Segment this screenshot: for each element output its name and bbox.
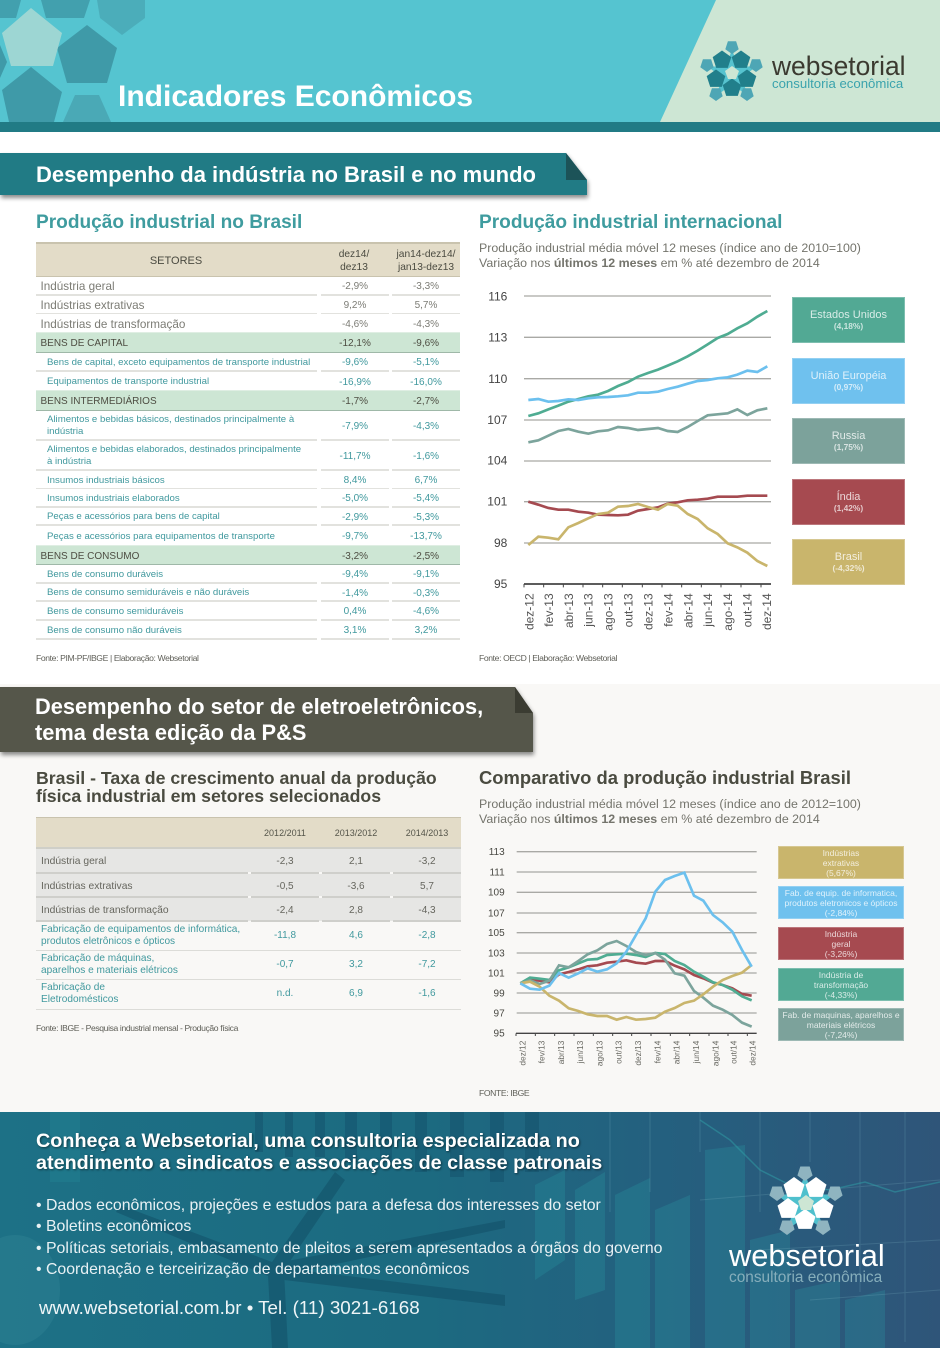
table header: 2014/2013 [406, 828, 448, 838]
x axis labels: ago/14 [710, 1040, 720, 1066]
legend: Indústria geral [778, 927, 904, 960]
row: Equipamentos de transporte [47, 376, 442, 388]
x axis labels: jun-13 [582, 593, 596, 628]
x axis labels: ago-14 [721, 593, 735, 631]
x axis labels: fev-14 [661, 593, 675, 627]
band: BENS INTERMEDIÁRIOS [36, 390, 460, 411]
legend: Fab. de máquinas: Fab. de maquinas, aparelhos e [782, 1010, 900, 1020]
row: Peças bens de capital [36, 511, 460, 526]
row: Alimentos básicos: -4,3% [413, 420, 439, 432]
legend: Fab. de equip. [778, 886, 904, 919]
row: Indústrias extrativas: Indústrias extrativas [41, 880, 133, 892]
row: não duráveis: Bens de consumo não duráveis [47, 624, 182, 636]
legend: Russia [792, 418, 905, 464]
legend: Brasil: Brasil [835, 551, 862, 563]
footer bullet list [36, 1197, 662, 1278]
table header: 2013/2012 [335, 828, 377, 838]
x axis labels: dez/13 [633, 1040, 643, 1066]
banner heading: Desempenho da indústria no Brasil e no mundo [36, 162, 536, 187]
row: consumo duráveis: -9,1% [413, 569, 439, 580]
table header: dez13 [340, 262, 368, 273]
y axis labels: 110 [488, 372, 508, 386]
chart description comparativo [479, 797, 861, 826]
row: não duráveis [36, 624, 460, 640]
row: Indústria geral: -2,9% [342, 281, 368, 292]
row: Indústrias de transformação: 2,8 [349, 904, 363, 916]
y axis labels [487, 289, 508, 591]
row: semiduráveis [36, 606, 460, 621]
table: produção industrial por setores [36, 242, 460, 640]
chart description international: Variação nos últimos 12 meses em % até dezembro de 2014 [479, 256, 820, 270]
row: Indústria geral: Indústria geral [41, 856, 106, 867]
row: Fabricação máquinas [36, 951, 461, 980]
table header: jan13-dez13 [398, 262, 454, 273]
series: Fab. de equip. de informática [520, 873, 752, 990]
brand name: websetorial [729, 1238, 885, 1273]
row: Indústria geral: -2,3 [276, 856, 294, 867]
row: Indústria geral: Indústria geral [40, 280, 115, 293]
row: Fabricação eletrodomésticos [36, 980, 461, 1010]
row: consumo duráveis [36, 568, 460, 584]
main title: Indicadores Econômicos [118, 80, 473, 113]
band: BENS DE CAPITAL: -9,6% [413, 338, 439, 349]
chart description international [479, 241, 861, 270]
legend: Indústria geral: Indústria [825, 928, 857, 938]
legend: Estados Unidos: Estados Unidos [810, 309, 887, 321]
x axis labels: out/13 [614, 1040, 624, 1064]
row: Peças equipamentos: -9,7% [342, 531, 368, 542]
row: consumo duráveis: -9,4% [342, 569, 368, 580]
row: Peças bens de capital: -5,3% [413, 512, 439, 522]
legend: Estados Unidos: (4,18%) [834, 321, 863, 331]
x axis [524, 584, 771, 587]
row: Indústrias extrativas: -0,5 [276, 880, 294, 892]
row: Indústrias extrativas [36, 299, 460, 314]
y axis labels: 107 [488, 908, 505, 919]
brand name: websetorial [772, 51, 906, 81]
series: Indústrias extrativas [520, 965, 752, 1020]
row: Indústrias extrativas [36, 874, 461, 898]
row: Indústria geral [36, 849, 461, 874]
row: Indústrias extrativas: -3,6 [347, 880, 365, 892]
legend: Indústrias extrativas: extrativas [823, 858, 859, 868]
source note chart 1: Fonte: OECD | Elaboração: Websetorial [479, 653, 617, 663]
band: BENS DE CAPITAL: BENS DE CAPITAL [40, 338, 128, 349]
contact line: www.websetorial.com.br • Tel. (11) 3021-6168 [39, 1297, 420, 1318]
y axis labels: 95 [494, 1029, 505, 1040]
y axis labels: 107 [487, 413, 508, 427]
row: Fabricação máquinas: -7,2 [418, 959, 436, 970]
row: não duráveis: 3,2% [415, 625, 437, 636]
row: Insumos elaborados [36, 492, 460, 508]
x axis labels: ago/13 [594, 1040, 604, 1066]
legend: Brasil: (-4,32%) [832, 563, 865, 573]
row: Alimentos elaborados: Alimentos e bebidas elaborados, destinados principalmente [47, 444, 301, 455]
row: Indústrias de transformação: -4,3 [418, 904, 436, 916]
x axis labels: ago-13 [602, 593, 616, 631]
x axis labels: jun-14 [701, 593, 715, 628]
legend: Indústria de transformação: transformação [814, 980, 868, 990]
y axis labels: 95 [494, 577, 508, 591]
row: Fabricação eletrodomésticos: Eletrodomésticos [41, 994, 118, 1005]
x axis labels: dez/12 [517, 1040, 527, 1066]
row: Indústrias extrativas: Indústrias extrativas [40, 299, 144, 312]
chart description comparativo: Variação nos últimos 12 meses em % até dezembro de 2014 [479, 812, 820, 826]
table header: 2012/2011 [264, 828, 306, 838]
row: Equipamentos de transporte: -16,9% [339, 376, 371, 388]
heading: taxa de crescimento: física industrial em setores selecionados [36, 786, 381, 806]
series: Fab. de máquinas [520, 941, 752, 1027]
y axis labels: 113 [489, 847, 505, 858]
row: Indústrias de transformação: Indústrias de transformação [40, 318, 185, 330]
legend: Indústria de transformação [778, 968, 904, 1001]
row: Insumos básicos [36, 474, 460, 489]
light corner panel [660, 0, 940, 122]
band: BENS DE CONSUMO [36, 545, 460, 565]
row: Fabricação informática: 4,6 [349, 930, 363, 941]
row: Alimentos elaborados: à indústria [47, 456, 91, 467]
row: Peças equipamentos: Peças e acessórios para equipamentos de transporte [47, 530, 275, 542]
row: Indústrias extrativas: 9,2% [344, 300, 366, 311]
row: Insumos básicos: 8,4% [344, 475, 366, 486]
band: BENS INTERMEDIÁRIOS: -2,7% [413, 396, 439, 407]
series: Brasil [528, 504, 767, 566]
brand tagline: consultoria econômica [729, 1269, 882, 1286]
y axis labels: 116 [488, 289, 508, 303]
band: BENS DE CONSUMO: -3,2% [342, 550, 368, 562]
row: Peças equipamentos [47, 530, 442, 542]
decorative pentagon pattern [0, 0, 145, 122]
row: Alimentos elaborados: -11,7% [340, 450, 370, 462]
heading: taxa de crescimento [36, 768, 437, 806]
heading: produção internacional: Produção industrial internacional [479, 212, 782, 233]
legend: Indústrias extrativas: Indústrias [823, 848, 859, 858]
x axis labels: abr/13 [556, 1040, 566, 1064]
row: Fabricação informática: -2,8 [418, 930, 436, 941]
x axis [516, 1033, 757, 1036]
row: Indústrias de transformação [36, 898, 461, 922]
dark footer strip of header [0, 122, 940, 132]
legend: Índia: (1,42%) [834, 503, 863, 513]
band: BENS INTERMEDIÁRIOS: -1,7% [342, 396, 368, 407]
chart description international: Produção industrial média móvel 12 meses (índice ano de 2010=100) [479, 241, 861, 255]
legend: União Européia [792, 358, 905, 404]
y axis labels: 99 [494, 988, 505, 999]
y axis labels: 101 [488, 968, 505, 979]
row: Equipamentos de transporte: Equipamentos de transporte industrial [47, 376, 209, 387]
row: Alimentos básicos: Alimentos e bebidas básicos, destinados principalmente à [47, 414, 294, 425]
row: Insumos básicos: 6,7% [415, 475, 437, 486]
chart description comparativo: Produção industrial média móvel 12 meses (índice ano de 2012=100) [479, 797, 861, 811]
legend: Indústria geral: geral [832, 938, 850, 948]
row: semiduráveis e não duráveis: Bens de consumo semiduráveis e não duráveis [47, 587, 249, 598]
x axis labels: abr-13 [562, 593, 576, 628]
band: BENS DE CONSUMO: BENS DE CONSUMO [40, 550, 139, 562]
section banner: indústria [0, 153, 591, 201]
series: Índia [528, 496, 767, 515]
row: Indústria geral: 2,1 [349, 856, 363, 867]
row: Indústrias de transformação: -4,6% [342, 318, 368, 330]
heading: produção brasil: Produção industrial no Brasil [36, 212, 302, 233]
x axis labels [522, 593, 774, 631]
legend: Fab. de máquinas: materiais elétricos [807, 1020, 875, 1030]
x axis labels: dez/14 [748, 1040, 758, 1066]
y axis labels: 109 [488, 888, 505, 899]
icon: pentagon logo [700, 41, 763, 101]
legend: Índia [792, 479, 905, 525]
row: Fabricação máquinas: -0,7 [276, 959, 294, 970]
row: Fabricação informática: Fabricação de equipamentos de informática, [41, 924, 240, 935]
row: Equipamentos de transporte: -16,0% [410, 376, 442, 388]
row: semiduráveis: 0,4% [344, 606, 366, 617]
row: Indústria geral: -3,3% [413, 281, 439, 292]
row: Fabricação máquinas: aparelhos e materiais elétricos [41, 965, 178, 976]
y axis labels: 113 [488, 331, 508, 345]
section banner: eletroeletrônicos [0, 687, 537, 758]
row: Fabricação informática: produtos eletrônicos e ópticos [41, 936, 175, 947]
row: Fabricação eletrodomésticos: 6,9 [349, 988, 363, 999]
footer heading [36, 1130, 604, 1175]
banner shape [0, 687, 537, 758]
row: Fabricação máquinas: Fabricação de máquinas, [41, 953, 154, 964]
table header [36, 817, 461, 849]
y axis labels: 111 [489, 867, 505, 878]
legend: Fab. de equip.: (-2,84%) [825, 908, 857, 918]
legend: Indústria de transformação: Indústria de [819, 970, 863, 980]
row: Indústria geral: -3,2 [418, 856, 436, 867]
row: Indústrias extrativas: 5,7% [415, 300, 437, 311]
y axis labels: 101 [487, 495, 508, 509]
legend: Russia: Russia [832, 430, 865, 442]
band: BENS DE CAPITAL: -12,1% [339, 338, 371, 349]
row: Alimentos básicos: indústria [47, 426, 83, 437]
banner heading: tema desta edição da P&S [35, 720, 306, 745]
footer heading: atendimento a sindicatos e associações de classe patronais [36, 1152, 602, 1174]
y axis labels: 97 [494, 1008, 505, 1019]
table header [36, 242, 460, 277]
row: Alimentos básicos: -7,9% [342, 420, 368, 432]
x axis labels: out/14 [729, 1040, 739, 1064]
series: Estados Unidos [528, 311, 767, 416]
row: Fabricação eletrodomésticos: n.d. [277, 988, 293, 999]
heading: taxa de crescimento: Brasil - Taxa de crescimento anual da produção [36, 768, 437, 788]
row: Fabricação máquinas: 3,2 [349, 959, 363, 970]
x axis labels: dez-13 [642, 593, 656, 630]
row: Bens de capital exceto: -9,6% [342, 357, 368, 368]
row: Insumos elaborados: -5,4% [413, 493, 439, 504]
legend: União Européia: (0,97%) [834, 382, 863, 392]
table header: dez14/ [339, 249, 369, 260]
bullet: • Políticas setoriais, embasamento de pleitos a serem apresentados a órgãos do governo [36, 1240, 662, 1257]
row: Bens de capital exceto: -5,1% [413, 357, 439, 368]
row: Indústrias de transformação: -2,4 [276, 904, 294, 916]
banner shape [0, 153, 591, 201]
row: Indústria geral [36, 280, 460, 296]
row: Indústrias extrativas: 5,7 [420, 880, 434, 892]
row: Indústrias de transformação [40, 318, 439, 330]
series: Russia [528, 408, 767, 442]
source note table 1: Fonte: PIM-PF/IBGE | Elaboração: Websetorial [36, 653, 199, 663]
row: consumo duráveis: Bens de consumo duráveis [47, 568, 163, 580]
band: BENS DE CAPITAL [36, 332, 460, 353]
icon: pentagon logo white [770, 1166, 842, 1235]
legend: Indústrias extrativas: (5,67%) [826, 868, 856, 878]
row: Fabricação informática [36, 922, 461, 951]
x axis labels [517, 1040, 758, 1066]
row: Indústrias de transformação: -4,3% [413, 318, 439, 330]
legend: Indústria geral: (-3,26%) [825, 948, 857, 958]
footer background chart motif [116, 1112, 940, 1348]
series: União Européia [528, 366, 767, 402]
series: Indústria de transformação [520, 953, 752, 1000]
y axis labels: 103 [488, 948, 505, 959]
row: Bens de capital exceto [36, 356, 460, 372]
table header: jan14-dez14/ [397, 249, 455, 260]
row: Fabricação informática: -11,8 [274, 930, 296, 941]
header band [0, 0, 940, 132]
row: Bens de capital exceto: Bens de capital, exceto equipamentos de transporte industrial [47, 356, 310, 368]
table header: SETORES [150, 255, 202, 267]
x axis labels: dez-12 [522, 593, 536, 630]
row: não duráveis: 3,1% [344, 625, 366, 636]
band: BENS DE CONSUMO: -2,5% [413, 550, 439, 562]
source note chart 2: FONTE: IBGE [479, 1088, 529, 1098]
row: semiduráveis e não duráveis [36, 587, 460, 602]
row: Fabricação eletrodomésticos: -1,6 [418, 988, 436, 999]
y axis labels [488, 847, 505, 1040]
row: Alimentos básicos [36, 414, 460, 441]
x axis labels: out-13 [622, 593, 636, 627]
row: Peças bens de capital: -2,9% [342, 512, 368, 522]
footer panel [0, 1112, 940, 1348]
row: Fabricação eletrodomésticos: Fabricação de [41, 982, 105, 993]
x axis labels: jun/13 [575, 1040, 585, 1064]
row: Insumos elaborados: Insumos industriais elaborados [47, 492, 180, 504]
banner heading: Desempenho do setor de eletroeletrônicos, [35, 694, 483, 719]
x axis labels: fev/14 [652, 1040, 662, 1063]
heading: comparativo: Comparativo da produção industrial Brasil [479, 767, 851, 788]
x axis labels: abr/14 [672, 1040, 682, 1064]
y axis labels: 105 [488, 928, 505, 939]
row: Insumos elaborados: -5,0% [342, 493, 368, 504]
legend: Estados Unidos [792, 297, 905, 343]
row: Insumos básicos: Insumos industriais básicos [47, 474, 165, 486]
legend: Indústrias extrativas [778, 846, 904, 879]
legend: Fab. de equip.: Fab. de equip. de informatica, [785, 888, 897, 898]
x axis labels: dez-14 [760, 593, 774, 630]
row: semiduráveis: -4,6% [413, 606, 439, 617]
y axis labels: 104 [487, 454, 508, 468]
legend: Fab. de equip.: produtos eletronicos e ópticos [785, 898, 897, 908]
legend: Brasil [792, 539, 905, 585]
x axis labels: out-14 [741, 593, 755, 627]
row: Indústrias de transformação: Indústrias de transformação [41, 904, 169, 916]
section background: eletroeletrônicos [0, 684, 940, 1112]
row: semiduráveis: Bens de consumo semiduráveis [47, 606, 183, 616]
bullet: • Coordenação e terceirização de departamentos econômicos [36, 1261, 470, 1278]
source note table 2: Fonte: IBGE - Pesquisa industrial mensal - Produção física [36, 1023, 238, 1033]
legend: Russia: (1,75%) [834, 442, 863, 452]
legend: Índia: Índia [837, 491, 860, 503]
logo: websetorial footer [729, 1166, 885, 1286]
line chart: produção industrial internacional [487, 289, 774, 631]
row: Peças equipamentos: -13,7% [410, 531, 442, 542]
table: taxa de crescimento [36, 817, 461, 1010]
x axis labels: fev-13 [542, 593, 556, 627]
row: Alimentos elaborados [36, 444, 460, 471]
legend: Fab. de máquinas [778, 1008, 904, 1041]
x axis labels: fev/13 [537, 1040, 547, 1063]
legend: Indústria de transformação: (-4,33%) [825, 990, 857, 1000]
series: Indústria geral [520, 960, 752, 996]
banner heading [35, 694, 483, 745]
legend: União Européia: União Européia [811, 370, 886, 382]
x axis labels: jun/14 [691, 1040, 701, 1064]
x axis labels: abr-14 [681, 593, 695, 628]
y axis labels: 98 [494, 536, 508, 550]
logo: websetorial header [700, 41, 906, 101]
brand tagline: consultoria econômica [772, 76, 903, 91]
row: Peças bens de capital: Peças e acessórios para bens de capital [47, 511, 220, 522]
bullet: • Dados econômicos, projeções e estudos para a defesa dos interesses do setor [36, 1197, 601, 1214]
row: semiduráveis e não duráveis: -1,4% [342, 588, 368, 598]
row: semiduráveis e não duráveis: -0,3% [413, 588, 439, 598]
legend: Fab. de máquinas: (-7,24%) [825, 1030, 857, 1040]
row: Alimentos elaborados: -1,6% [413, 450, 439, 462]
footer heading: Conheça a Websetorial, uma consultoria especializada no [36, 1130, 580, 1152]
line chart: comparativo Brasil [488, 847, 758, 1066]
band: BENS INTERMEDIÁRIOS: BENS INTERMEDIÁRIOS [40, 396, 157, 407]
bullet: • Boletins econômicos [36, 1218, 191, 1235]
